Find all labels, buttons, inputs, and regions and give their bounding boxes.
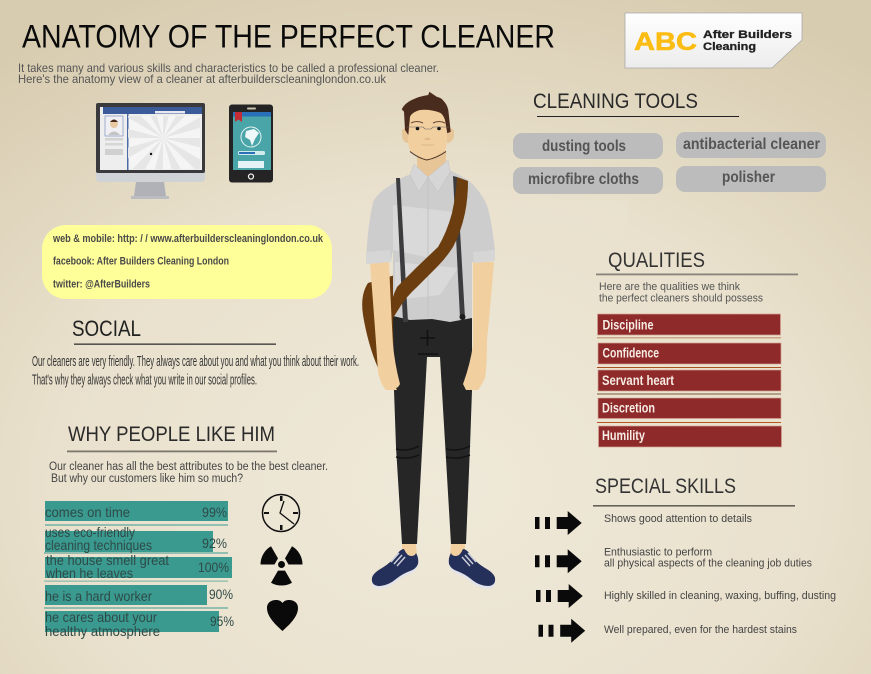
bar chart: customer attributes: the house smell great [46,552,169,568]
quality bars: Servant heart [602,373,674,388]
skills text: all physical aspects of the cleaning job duties [604,558,812,570]
arrow: skill 3 [536,584,583,608]
panel: special skills [535,475,836,643]
jaw line [410,152,446,160]
bar chart: customer attributes: he is a hard worker [45,588,152,604]
face [408,107,447,160]
ankles [402,544,465,560]
logo: After Builders Cleaning: ABC [634,28,697,56]
panel: why people like him: But why our customers like him so much? [51,473,243,485]
bar chart: customer attributes: 100% [198,559,229,575]
skills text: Enthusiastic to perform [604,546,712,558]
panel: qualities [596,249,798,447]
panel: contact details: twitter: @AfterBuilders [53,278,150,290]
intro text: It takes many and various skills and characteristics to be called a professional cleaner. [18,61,439,75]
panel: qualities: Here are the qualities we think [599,281,740,293]
panel: qualities: the perfect cleaners should possess [599,292,763,304]
icon: smartphone [229,104,273,182]
panel: social: SOCIAL [72,316,141,341]
legs and trousers [393,316,472,544]
bag [362,275,395,368]
bar chart: customer attributes: healthy atmosphere [45,623,160,639]
tool: dusting tools [513,133,663,159]
bar chart: customer attributes: 99% [202,504,227,520]
panel: cleaning tools: CLEANING TOOLS [533,90,698,113]
bar chart: customer attributes [44,501,234,639]
left arm and hand [370,262,400,390]
figure: cleaner [362,92,495,589]
panel: contact details: facebook: After Builders Cleaning London [53,256,229,268]
bar chart: customer attributes: 92% [202,535,227,551]
neck [417,150,446,178]
panel: contact details [42,225,332,299]
bar chart: customer attributes: he cares about your [45,609,157,625]
bar chart: customer attributes: when he leaves [45,565,133,581]
logo: After Builders Cleaning: Cleaning [703,41,756,53]
quality bars [597,314,782,447]
panel: why people like him: WHY PEOPLE LIKE HIM [68,423,275,446]
rolled cuffs [366,250,495,264]
bar chart: customer attributes: comes on time [45,504,130,520]
arrow: skill 2 [535,549,582,573]
bar chart: customer attributes: uses eco-friendly [45,524,135,540]
bar chart: customer attributes: cleaning techniques [45,537,152,553]
panel: social [32,316,359,388]
icon: clock [262,494,300,532]
panel: why people like him: Our cleaner has all the best attributes to be the best cleaner. [49,461,328,473]
skills text: Highly skilled in cleaning, waxing, buffing, dusting [604,590,836,602]
right arm and hand [463,262,494,390]
panel: special skills: SPECIAL SKILLS [595,475,736,498]
suspenders [396,176,465,322]
bar chart: customer attributes: 90% [209,586,233,602]
hair [402,92,451,135]
ears [402,128,454,143]
panel: qualities: QUALITIES [608,249,705,272]
collar [410,160,450,192]
shoulder strap [392,177,468,318]
panel: cleaning tools [513,90,826,194]
tool: microfibre cloths: microfibre cloths [528,171,639,188]
quality bars: Humility [602,428,645,443]
tool: antibacterial cleaner [676,132,826,158]
bar chart: customer attributes: 95% [210,613,234,629]
title: ANATOMY OF THE PERFECT CLEANER [22,18,555,54]
quality bars: Confidence [602,346,659,360]
intro text: Here's the anatomy view of a cleaner at afterbuilderscleaninglondon.co.uk [18,72,387,86]
intro text [18,61,439,86]
skills text: Shows good attention to details [604,513,752,525]
icon: heart [267,600,298,631]
panel: contact details: web & mobile: http: / / www.afterbuilderscleaninglondon.co.uk [52,233,324,245]
arrow: skill 1 [535,511,582,535]
eyes and glasses [411,122,445,123]
panel: why people like him [44,423,328,639]
shoe: right [449,549,495,589]
shirt [366,160,495,322]
tool: antibacterial cleaner: antibacterial cleaner [683,136,820,153]
shirt folds [393,205,458,300]
shoe: left [372,549,418,589]
logo: After Builders Cleaning: After Builders [703,29,792,41]
quality bars: Discretion [602,400,655,416]
icon: radiation symbol [260,546,302,586]
arrow: skill 4 [538,619,585,643]
panel: social: That's why they always check what you write in our social profiles. [32,372,257,388]
tool: dusting tools: dusting tools [542,138,626,155]
skills text: Well prepared, even for the hardest stains [604,624,797,636]
skills text [604,513,836,636]
tool: polisher [676,166,826,192]
panel: social: Our cleaners are very friendly. They always care about you and what you think about their work. [32,353,359,370]
logo: After Builders Cleaning [625,13,802,68]
knee creases [396,446,470,458]
tool: microfibre cloths [513,167,663,194]
belt marks [418,330,438,354]
icon: desktop monitor [96,98,205,199]
quality bars: Discipline [602,318,654,332]
tool: polisher: polisher [722,169,775,186]
